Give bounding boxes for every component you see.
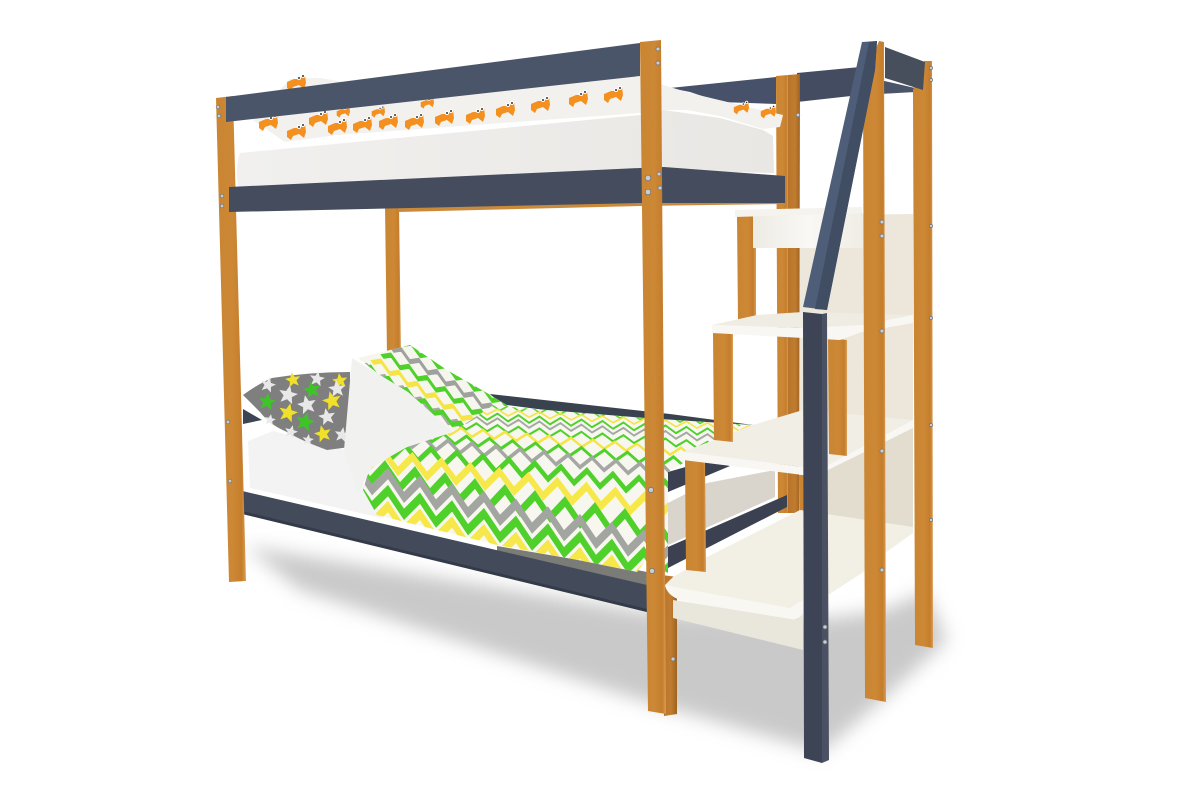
lower bunk: [243, 345, 787, 612]
handrail shaded side: [815, 41, 877, 310]
step two left leg: [713, 333, 733, 442]
orange fox motifs: [259, 74, 776, 140]
wood slat under rail: [398, 199, 782, 212]
photo: bunk bed with staircase: [216, 40, 952, 763]
post front face: [803, 312, 822, 763]
blanket chevron rows: [363, 405, 752, 573]
main post: [640, 40, 666, 714]
top step tread: [735, 207, 862, 217]
step three tread: [683, 410, 913, 467]
bedding cloth: [253, 70, 783, 142]
floor shadow: [245, 546, 947, 752]
step four apron: [673, 600, 803, 650]
rear leg of step four: [799, 475, 804, 596]
low side rail: [668, 495, 787, 568]
staircase: [665, 41, 933, 763]
upper back rail right section: [797, 67, 860, 102]
upper bunk: [226, 43, 785, 212]
pillow: [243, 370, 351, 450]
back right double post: [776, 74, 800, 513]
step three leg: [685, 459, 706, 572]
step two tread: [712, 312, 913, 328]
side top rail: [885, 47, 925, 90]
lower back rail: [490, 394, 753, 431]
post side face: [822, 313, 829, 763]
white turned-back flap: [344, 358, 453, 493]
lower side rail: [238, 490, 647, 612]
upper front top rail: [226, 43, 640, 122]
pillow stars: [258, 370, 351, 446]
post left half: [776, 75, 788, 513]
fold chevron rows: [364, 345, 508, 428]
rail beneath blanket: [668, 460, 730, 492]
lower mattress: [248, 431, 382, 518]
left front post: [216, 96, 246, 582]
blanket fold chevrons: [358, 345, 510, 432]
upper rail behind staircase post: [880, 80, 915, 94]
top step leg: [737, 216, 756, 322]
screws: [216, 47, 933, 661]
rail top shadow strip: [497, 546, 647, 587]
step four tread: [665, 510, 913, 612]
navy vertical post: [803, 312, 829, 763]
cream back panel: [798, 214, 913, 527]
blanket chevrons: [363, 405, 752, 573]
back left post: [385, 205, 401, 356]
staircase side mattress: [668, 470, 775, 545]
fold background: [358, 346, 510, 432]
staircase front post: [863, 41, 886, 702]
navy handrail diagonal: [803, 41, 877, 310]
blanket background: [364, 406, 752, 572]
handrail face: [803, 41, 877, 310]
upper mattress: [237, 110, 774, 187]
post right half: [788, 74, 800, 513]
step four front edge: [665, 585, 803, 620]
small back crossbars: [243, 409, 262, 424]
step three front edge: [683, 420, 913, 475]
rear strip: [662, 575, 677, 716]
pillow case: [243, 372, 350, 450]
lower rail top edge: [238, 510, 647, 612]
top step apron: [753, 213, 863, 248]
back structure: [385, 67, 915, 527]
upper back rail: [670, 77, 776, 104]
center front post: [640, 40, 677, 716]
far right post: [913, 61, 933, 648]
step two front edge: [712, 315, 913, 340]
upper bedding: [253, 70, 783, 142]
panel shadow tone: [828, 428, 913, 527]
upper front lower rail: [229, 167, 785, 212]
step two right leg: [828, 338, 847, 456]
